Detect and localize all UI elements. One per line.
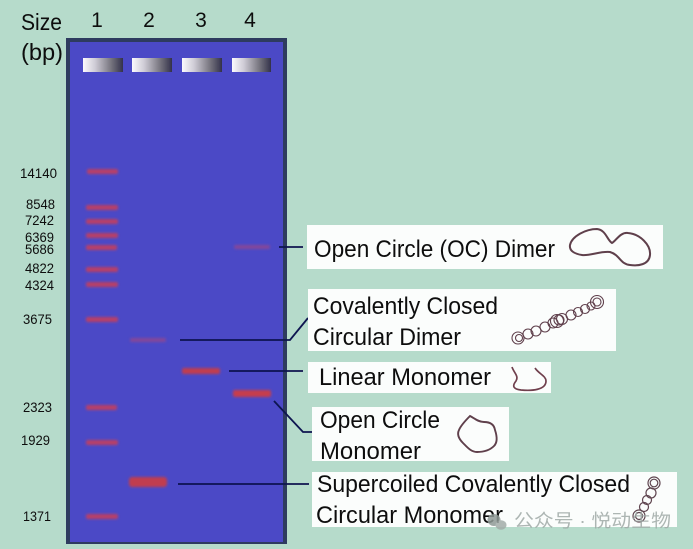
- callout: linear monomer: Linear Monomer: [319, 364, 491, 391]
- leader lines: [178, 247, 314, 484]
- icon: open circle dimer: [570, 229, 650, 265]
- lane numbers: 3: [195, 9, 207, 32]
- size ladder labels: 4324: [25, 278, 54, 293]
- heading: size axis title: Size: [21, 9, 62, 35]
- callout: open circle monomer: [312, 407, 509, 465]
- callout: supercoiled covalently closed circular monomer: Circular Monomer: [316, 502, 503, 529]
- callout: covalently closed circular dimer: Circular Dimer: [313, 324, 461, 351]
- callout: covalently closed circular dimer: [308, 289, 616, 351]
- size ladder labels: 1371: [23, 509, 51, 524]
- size ladder labels: 1929: [21, 433, 50, 448]
- lane numbers: 1: [91, 9, 103, 32]
- callout: open circle dimer: [307, 225, 663, 269]
- size ladder labels: 8548: [26, 197, 55, 212]
- lane 3: linear monomer band: [182, 368, 220, 374]
- panel: gel: [68, 40, 285, 544]
- icon: open circle: [458, 416, 497, 452]
- icon: chat logo: [488, 514, 506, 530]
- size ladder labels: 7242: [25, 213, 54, 228]
- size ladder labels: 14140: [20, 166, 57, 181]
- size ladder labels: 5686: [25, 242, 54, 257]
- callout: linear monomer: [308, 362, 551, 393]
- lane numbers: 2: [143, 9, 155, 32]
- lane numbers: 4: [244, 9, 256, 32]
- size ladder labels: [20, 166, 57, 524]
- lane 4: sample bands: [233, 245, 271, 397]
- heading: size axis title: (bp): [21, 39, 63, 65]
- icon: supercoiled monomer beads: [633, 477, 660, 522]
- watermark: 公众号 · 悦动生物: [514, 511, 671, 531]
- callout: supercoiled covalently closed circular monomer: [312, 471, 677, 529]
- callout: supercoiled covalently closed circular monomer: Supercoiled Covalently Closed: [317, 471, 630, 498]
- lane 2: sample bands: [129, 338, 167, 487]
- size ladder labels: 3675: [23, 312, 52, 327]
- sample wells: [83, 58, 271, 72]
- lane 1: ladder bands: [86, 169, 118, 519]
- lane numbers: [91, 9, 256, 32]
- callout: open circle monomer: Monomer: [320, 438, 421, 465]
- callout: open circle dimer: Open Circle (OC) Dimer: [314, 236, 555, 263]
- size ladder labels: 6369: [25, 230, 54, 245]
- size ladder labels: 4822: [25, 261, 54, 276]
- icon: supercoiled dimer beads: [512, 296, 604, 344]
- callout: covalently closed circular dimer: Covalently Closed: [313, 293, 498, 320]
- callout: open circle monomer: Open Circle: [320, 407, 440, 434]
- heading: size axis title: [21, 9, 63, 65]
- size ladder labels: 2323: [23, 400, 52, 415]
- icon: linear DNA: [512, 367, 546, 390]
